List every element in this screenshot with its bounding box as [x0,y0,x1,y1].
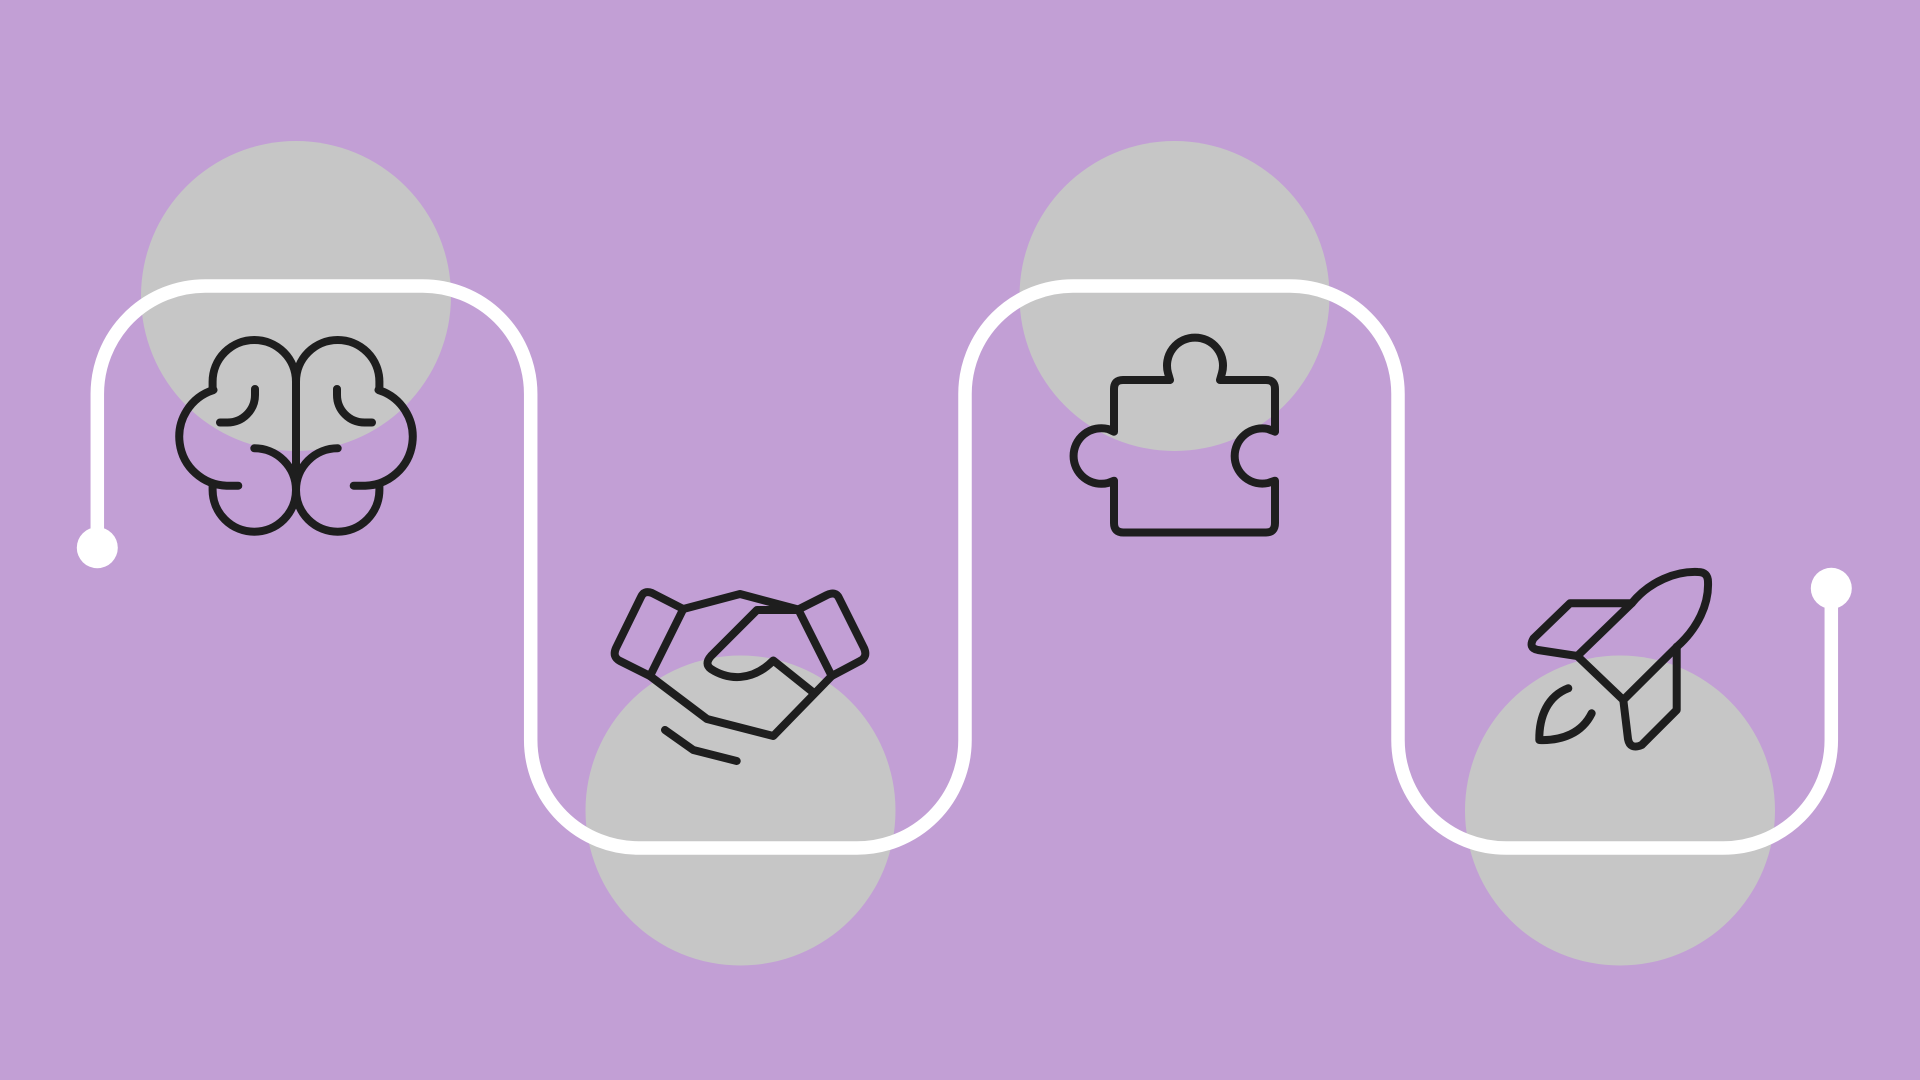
icon: brain [179,340,413,532]
circle: step 3 backdrop [1020,141,1330,451]
winding path line [97,286,1831,848]
icon: puzzle piece [1074,338,1275,532]
circle: step 1 backdrop [141,141,451,451]
path start dot [77,527,118,568]
icon: rocket [1532,572,1708,747]
circle: step 2 backdrop [586,656,896,966]
path end dot [1811,568,1852,609]
icon: handshake [615,592,865,761]
circle: step 4 backdrop [1465,656,1775,966]
